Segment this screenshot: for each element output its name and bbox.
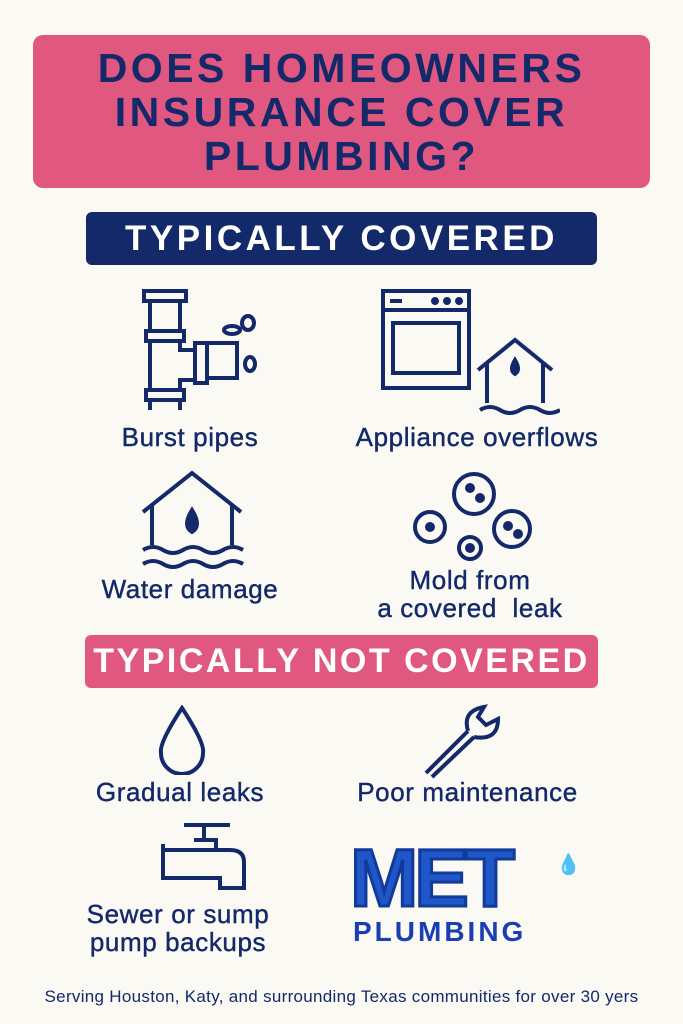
icon: wrench (424, 704, 500, 778)
icon: mold (413, 472, 532, 561)
label: water damage: Water damage (102, 574, 278, 604)
label: mold: Mold from (410, 565, 530, 595)
logo: MET plumbing: 💧 (556, 854, 581, 876)
logo: MET plumbing (350, 833, 581, 947)
label: sewer: Sewer or sump (87, 899, 269, 929)
icon: faucet (161, 823, 246, 890)
label: gradual leaks: Gradual leaks (96, 777, 264, 807)
label: mold (377, 565, 563, 623)
heading: typically not covered (85, 635, 598, 688)
icon: appliance overflow (381, 289, 560, 415)
label: mold: a covered leak (377, 593, 563, 623)
label: appliance overflows: Appliance overflows (356, 422, 598, 452)
heading: typically not covered: TYPICALLY NOT COVERED (93, 642, 590, 680)
title: INSURANCE COVER (115, 89, 568, 135)
icon: water damage (142, 470, 244, 569)
heading: typically covered (86, 212, 597, 265)
label: poor maintenance: Poor maintenance (357, 777, 578, 807)
logo: MET plumbing: MET (350, 833, 511, 924)
icon: burst pipe (142, 289, 257, 410)
label: burst pipes: Burst pipes (122, 422, 258, 452)
logo: MET plumbing: PLUMBING (353, 916, 526, 947)
title: PLUMBING? (204, 133, 479, 179)
label: sewer (87, 899, 269, 957)
title: DOES HOMEOWNERS (98, 45, 585, 91)
label: sewer: pump backups (90, 927, 266, 957)
footer: Serving Houston, Katy, and surrounding Texas communities for over 30 yers (45, 987, 638, 1006)
title (33, 35, 650, 188)
heading: typically covered: TYPICALLY COVERED (125, 219, 558, 258)
icon: drop (158, 705, 206, 775)
